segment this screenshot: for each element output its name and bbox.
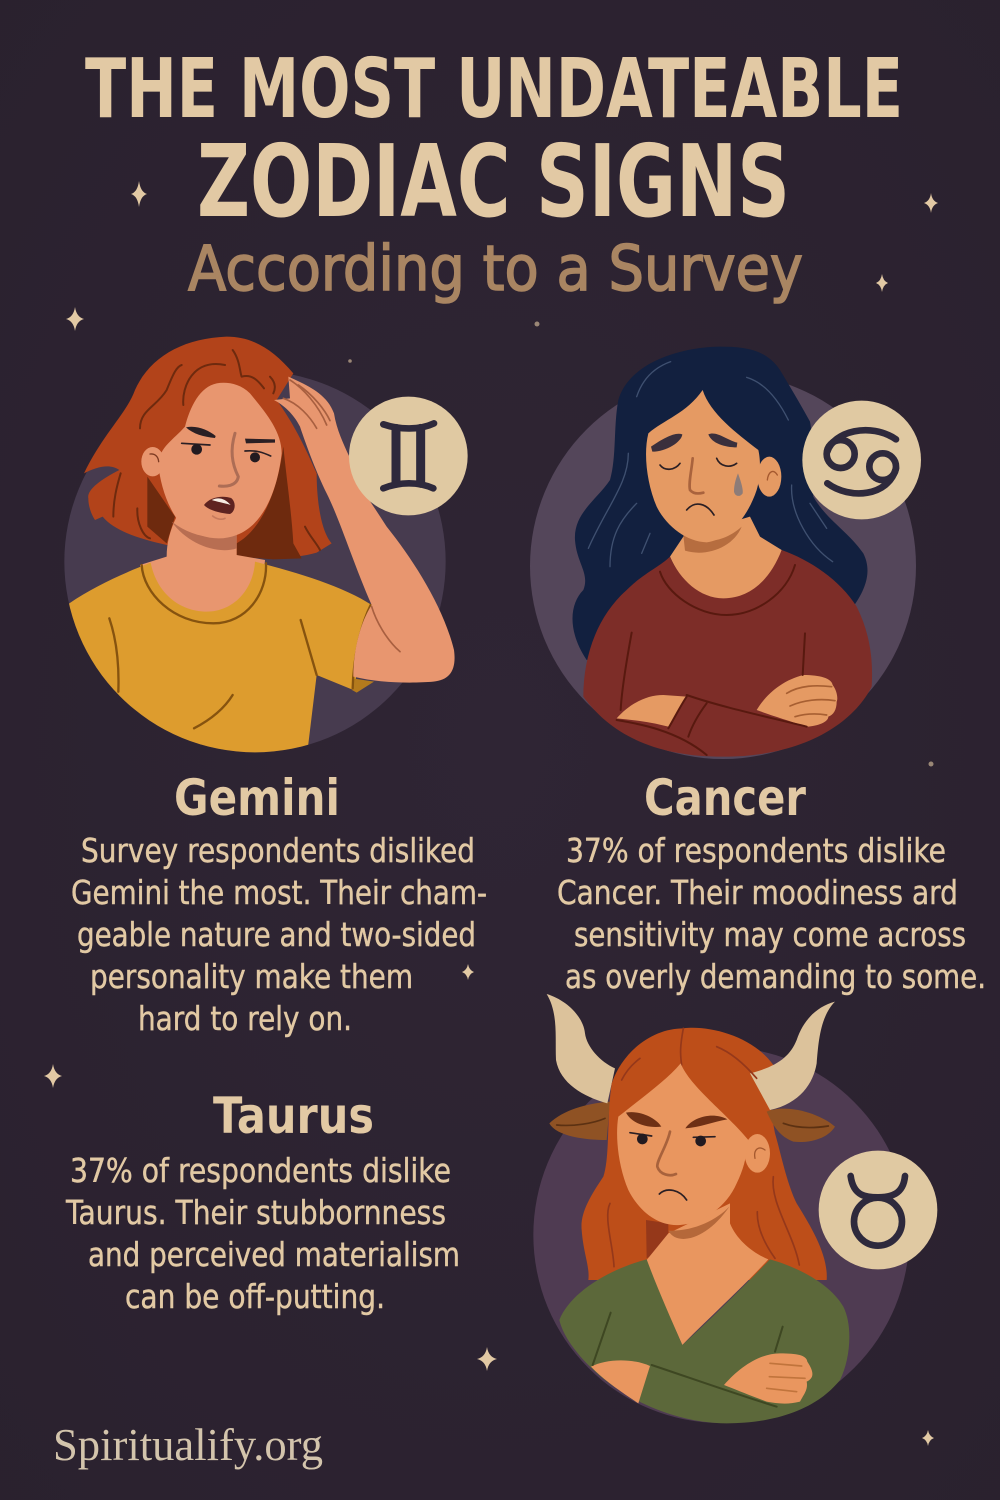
- neck: [140, 517, 265, 620]
- text block: Gemini description: hard to rely on.: [138, 1000, 352, 1038]
- text block: Taurus description: can be off-putting.: [125, 1278, 385, 1316]
- heading: Cancer: Cancer: [644, 769, 806, 827]
- neck: [647, 1203, 768, 1345]
- facial features: [182, 427, 275, 519]
- text block: Gemini description: Gemini the most. Their cham-: [71, 874, 487, 912]
- face: [141, 447, 164, 476]
- text block: Cancer description: [557, 832, 986, 996]
- panel: Cancer text: [557, 769, 986, 996]
- title: ZODIAC SIGNS: [197, 123, 790, 240]
- neck: [670, 517, 782, 602]
- face: [757, 457, 781, 497]
- text block: Taurus description: and perceived materialism: [88, 1236, 460, 1274]
- facial features: [651, 433, 743, 515]
- bull horn: right: [750, 1002, 835, 1110]
- shirt: [559, 1259, 849, 1423]
- hair strands: [113, 350, 320, 552]
- zodiac badge: Taurus: [819, 1151, 937, 1269]
- panel: Taurus text: [65, 1087, 460, 1316]
- bull ear: left: [549, 1102, 610, 1140]
- hair: Gemini: [84, 337, 332, 557]
- crossed arms: [591, 1353, 812, 1404]
- text block: Gemini description: personality make them: [90, 958, 413, 996]
- shirt: [60, 562, 372, 763]
- text block: Taurus description: Taurus. Their stubbornness: [65, 1194, 446, 1232]
- hair: Cancer: [572, 347, 867, 660]
- hair: Taurus: [581, 1028, 827, 1280]
- title: [85, 42, 903, 240]
- text block: Gemini description: [71, 832, 487, 1038]
- shirt: [583, 550, 872, 757]
- heading: Taurus: Taurus: [213, 1087, 374, 1145]
- bull horn: left: [547, 994, 615, 1103]
- illustration: Cancer woman: [530, 347, 921, 759]
- face: [745, 1134, 770, 1173]
- facial features: [626, 1112, 727, 1200]
- crossed arms: [617, 675, 837, 727]
- text block: Taurus description: 37% of respondents dislike: [70, 1152, 451, 1190]
- text block: Taurus description: [65, 1152, 460, 1316]
- zodiac badge: Gemini: [349, 397, 468, 515]
- arm: [274, 377, 455, 683]
- panel: Gemini text: [71, 769, 487, 1038]
- source credit: Spiritualify.org: [53, 1419, 323, 1470]
- heading: Gemini: Gemini: [174, 769, 340, 827]
- bull ear: right: [767, 1109, 835, 1142]
- illustration: Gemini woman: [60, 337, 468, 763]
- decorative stars: [44, 181, 938, 1446]
- text block: Gemini description: Survey respondents disliked: [81, 832, 475, 870]
- text block: Gemini description: geable nature and two-sided: [77, 916, 476, 954]
- subtitle: According to a Survey: [188, 232, 803, 305]
- text block: Cancer description: 37% of respondents dislike: [566, 832, 946, 870]
- illustration: Taurus woman: [533, 994, 937, 1423]
- zodiac badge: Cancer: [802, 401, 921, 519]
